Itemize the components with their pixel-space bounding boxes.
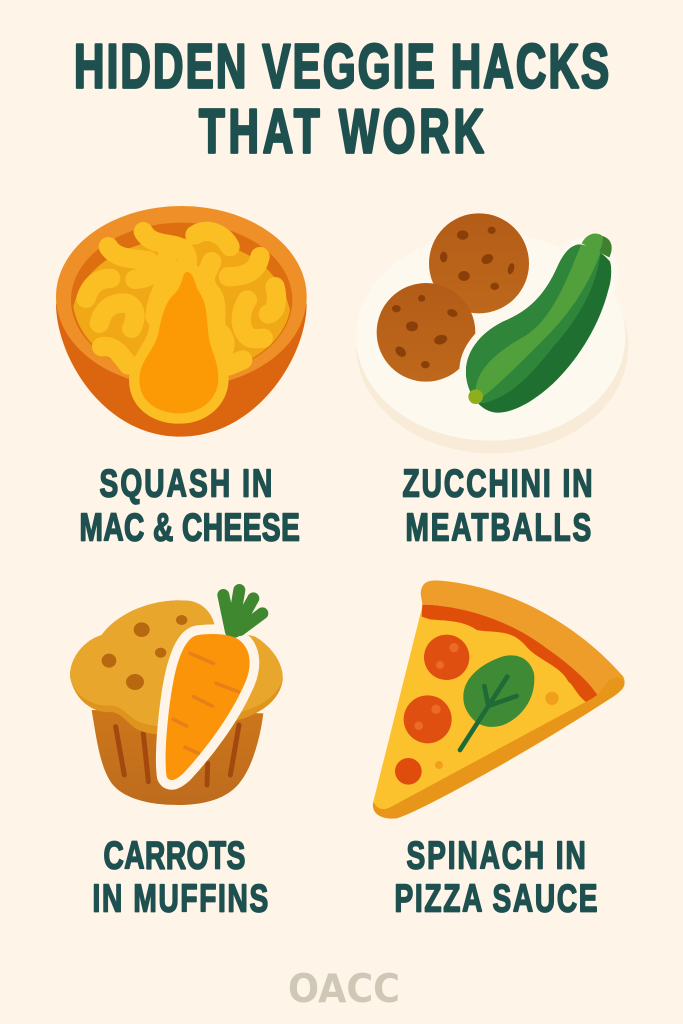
icon: pizza cheese xyxy=(373,605,600,811)
icon: muffin liner xyxy=(92,710,263,805)
label: zucchini in meatballs: ZUCCHINI IN xyxy=(402,462,593,506)
title: THAT WORK xyxy=(199,98,484,167)
label: carrots in muffins: CARROTS xyxy=(104,834,245,878)
icon: spinach leaf xyxy=(460,655,534,750)
label: spinach in pizza sauce: SPINACH IN xyxy=(406,834,586,878)
watermark logo: OACC xyxy=(288,967,400,1012)
icon: pizza outer edge xyxy=(373,677,624,819)
panel: spinach in pizza sauce illustration xyxy=(373,581,625,819)
icon: zucchini xyxy=(460,233,617,417)
label: carrots in muffins: IN MUFFINS xyxy=(92,877,268,921)
infographic xyxy=(56,42,628,1002)
icon: lower meatball xyxy=(377,283,475,382)
label: spinach in pizza sauce: PIZZA SAUCE xyxy=(394,877,598,921)
label: zucchini in meatballs: MEATBALLS xyxy=(406,506,591,550)
title xyxy=(74,33,609,167)
title: HIDDEN VEGGIE HACKS xyxy=(74,33,609,102)
icon: pepperoni slices xyxy=(395,635,559,785)
panel: carrots in muffins illustration xyxy=(70,590,283,805)
label: zucchini in meatballs xyxy=(402,462,593,550)
icon: pizza sauce xyxy=(422,605,597,703)
panel: zucchini in meatballs illustration xyxy=(356,213,628,453)
icon: carrot xyxy=(166,590,262,780)
label: carrots in muffins xyxy=(92,834,268,921)
label: spinach in pizza sauce xyxy=(394,834,598,921)
label: squash in mac and cheese: MAC & CHEESE xyxy=(80,506,300,550)
panel: squash in mac and cheese illustration xyxy=(56,206,307,437)
icon: upper meatball xyxy=(429,213,529,313)
icon: butternut squash xyxy=(139,272,218,413)
icon: pizza crust xyxy=(421,581,625,696)
label: squash in mac and cheese xyxy=(80,462,300,550)
label: squash in mac and cheese: SQUASH IN xyxy=(100,462,272,506)
icon: muffin top xyxy=(70,600,283,735)
